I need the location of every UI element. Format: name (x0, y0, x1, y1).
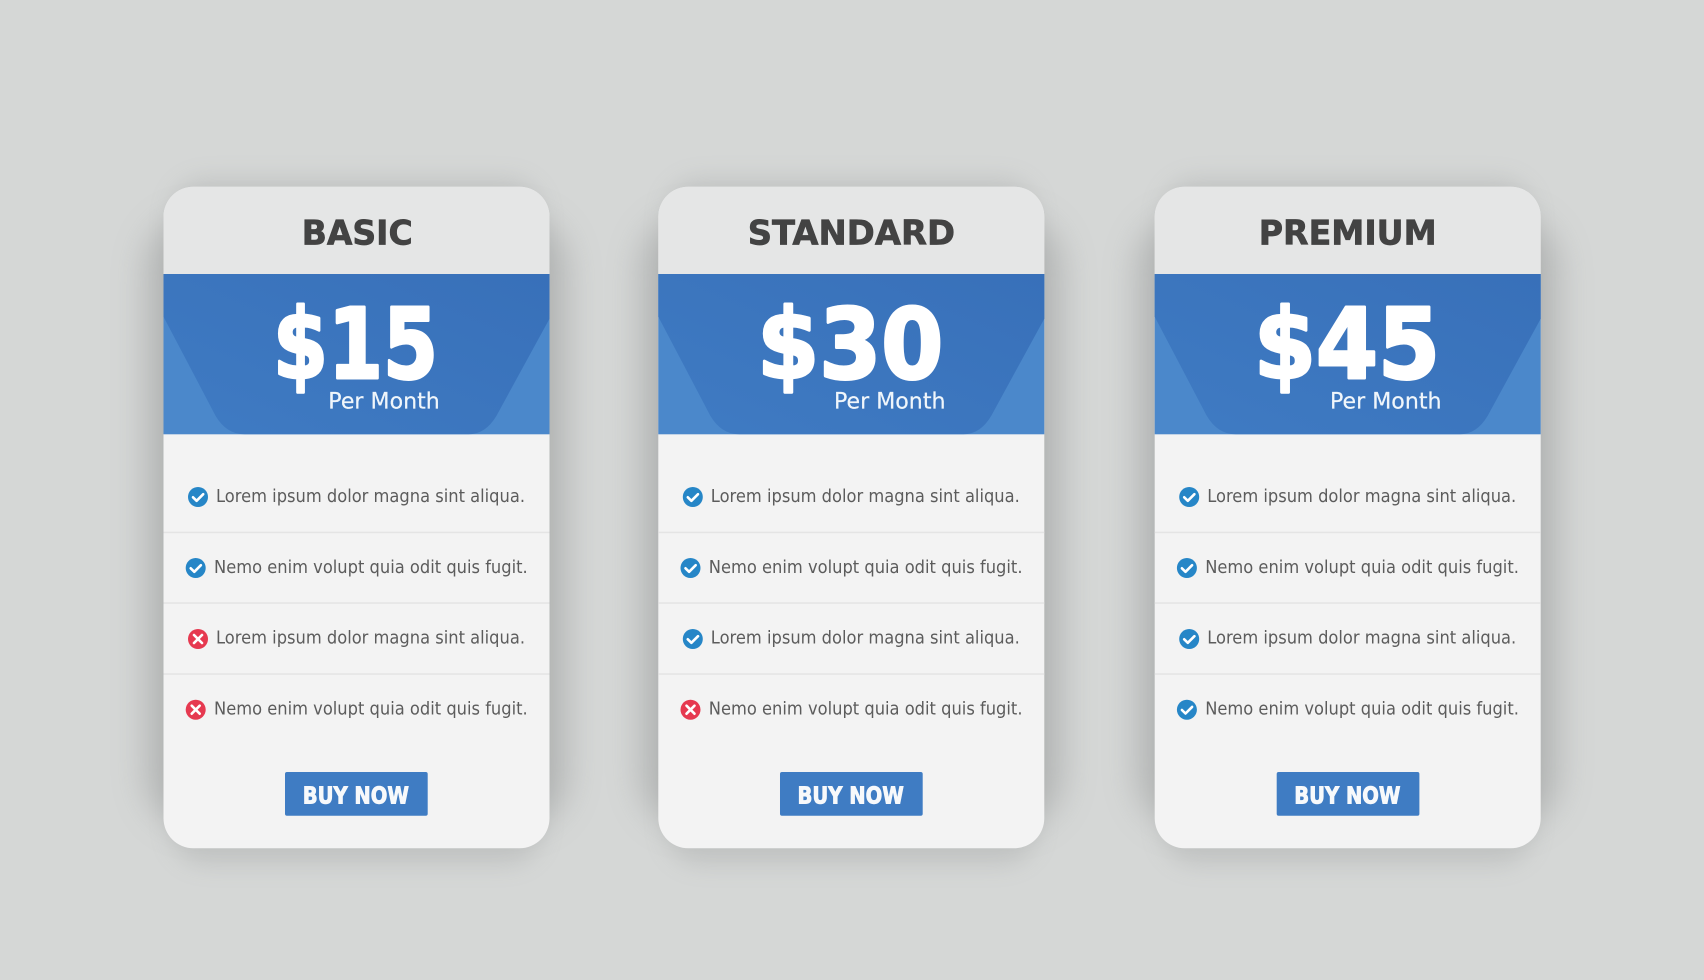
feature 3: Lorem ipsum dolor magna sint aliqua. (711, 629, 1020, 649)
feature 2: Nemo enim volupt quia odit quis fugit. (1205, 558, 1519, 578)
buy now button (1277, 772, 1419, 816)
feature 1: Lorem ipsum dolor magna sint aliqua. (216, 487, 525, 507)
buy now button: BUY NOW (797, 783, 904, 809)
per month label: Per Month (1330, 390, 1441, 415)
price: $30 (757, 288, 943, 401)
per month label: Per Month (328, 390, 440, 415)
feature 4: Nemo enim volupt quia odit quis fugit. (1205, 700, 1519, 720)
panel: standard plan card (640, 179, 1062, 865)
plan title: PREMIUM (1259, 213, 1437, 253)
feature 4: Nemo enim volupt quia odit quis fugit. (709, 700, 1022, 720)
card body (658, 187, 1044, 848)
panel: basic plan card (146, 179, 568, 865)
price banner (658, 274, 1044, 434)
feature 1: Lorem ipsum dolor magna sint aliqua. (711, 487, 1020, 507)
price: $15 (273, 288, 438, 401)
plan title: BASIC (302, 213, 413, 253)
feature 2: Nemo enim volupt quia odit quis fugit. (709, 558, 1022, 578)
card body (164, 187, 550, 848)
header band (164, 187, 550, 275)
card shadow (640, 179, 1062, 865)
feature 4: Nemo enim volupt quia odit quis fugit. (214, 700, 528, 720)
buy now button (285, 772, 428, 816)
feature 3: Lorem ipsum dolor magna sint aliqua. (1207, 629, 1516, 649)
per month label: Per Month (834, 390, 946, 415)
card body (1155, 187, 1541, 848)
panel: premium plan card (1137, 179, 1559, 865)
header band (1155, 187, 1541, 275)
price banner (1155, 274, 1541, 434)
card shadow (1137, 179, 1559, 865)
feature 1: Lorem ipsum dolor magna sint aliqua. (1207, 487, 1516, 507)
price banner (164, 274, 550, 434)
buy now button: BUY NOW (303, 783, 409, 809)
header band (658, 187, 1044, 275)
plan title: STANDARD (748, 213, 955, 253)
buy now button (780, 772, 923, 816)
card shadow (146, 179, 568, 865)
feature 2: Nemo enim volupt quia odit quis fugit. (214, 558, 528, 578)
feature 3: Lorem ipsum dolor magna sint aliqua. (216, 629, 525, 649)
buy now button: BUY NOW (1294, 783, 1400, 809)
price: $45 (1254, 288, 1440, 401)
